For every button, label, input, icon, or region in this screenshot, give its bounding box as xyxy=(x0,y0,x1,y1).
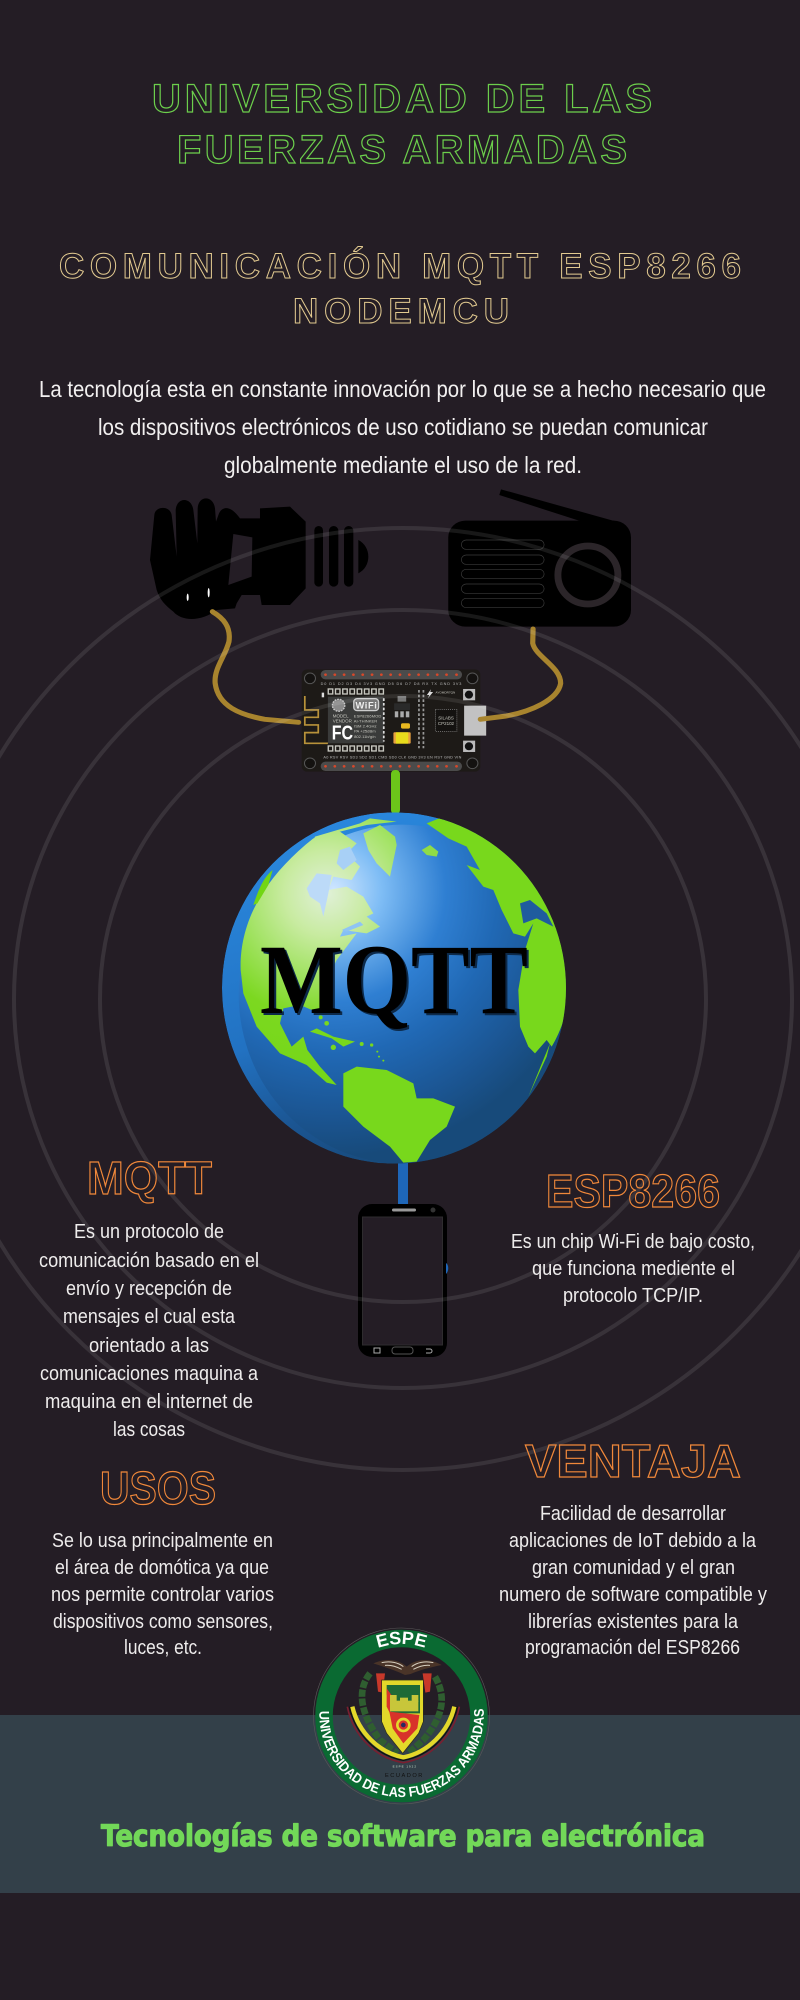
microcontroller board: NodeMCU ESP8266: 802.11b/g/n xyxy=(354,734,376,739)
microcontroller board: NodeMCU ESP8266: MODEL xyxy=(333,713,349,718)
intro paragraph: los dispositivos electrónicos de uso cotidiano se puedan comunicar xyxy=(98,414,708,440)
text: USOS description xyxy=(51,1529,274,1659)
text: ESP8266 description xyxy=(511,1230,755,1307)
text: USOS description: Se lo usa principalmente en xyxy=(52,1529,273,1552)
text: MQTT description: mensajes el cual esta xyxy=(63,1305,236,1328)
microcontroller board: NodeMCU ESP8266: AYOMDR7QN xyxy=(435,690,455,694)
text: MQTT description: Es un protocolo de xyxy=(74,1220,224,1243)
title xyxy=(152,77,652,172)
cable: radio to board xyxy=(480,629,561,719)
connector: globe to phone xyxy=(398,1160,408,1205)
university logo xyxy=(313,1628,490,1804)
microcontroller board: NodeMCU ESP8266: WiFi xyxy=(355,700,377,710)
microcontroller board: NodeMCU ESP8266: ESP8266MOD xyxy=(354,713,381,718)
text: MQTT description: orientado a las xyxy=(89,1334,209,1357)
microcontroller board: NodeMCU ESP8266: D0 D1 D2 D3 D4 3V3 GND D5 D6 D7 D8 RX TX GND 3V3 xyxy=(321,682,461,686)
title: FUERZAS ARMADAS xyxy=(177,128,627,172)
text: USOS description: nos permite controlar varios xyxy=(51,1583,274,1606)
text: MQTT description xyxy=(39,1220,259,1441)
university logo: ESPE xyxy=(376,1632,428,1648)
university logo: UNIVERSIDAD DE LAS FUERZAS ARMADAS xyxy=(319,1709,484,1798)
text: VENTAJA description: numero de software compatible y xyxy=(499,1583,768,1606)
text: MQTT description: envío y recepción de xyxy=(66,1277,232,1300)
intro paragraph xyxy=(39,376,766,478)
microcontroller board: NodeMCU ESP8266: AI-THINKER xyxy=(354,718,377,723)
text: VENTAJA description: Facilidad de desarrollar xyxy=(540,1502,726,1525)
subtitle xyxy=(59,246,741,331)
heading: MQTT: MQTT xyxy=(87,1152,212,1204)
icon: light bulb xyxy=(150,498,368,619)
text: VENTAJA description xyxy=(499,1502,768,1659)
heading: USOS: USOS xyxy=(100,1462,216,1514)
crest xyxy=(347,1660,459,1779)
microcontroller board: NodeMCU ESP8266: A0 RSV RSV SD3 SD2 SD1 CMD SD0 CLK GND 3V3 EN RST GND VIN xyxy=(323,756,462,760)
crest: ECUADOR xyxy=(385,1773,422,1779)
text: VENTAJA description: librerías existentes para la xyxy=(528,1610,739,1633)
panel: MQTT xyxy=(39,1152,259,1441)
microcontroller board: NodeMCU ESP8266: FC xyxy=(332,723,353,744)
text: VENTAJA description: aplicaciones de IoT debido a la xyxy=(509,1529,757,1552)
text: ESP8266 description: protocolo TCP/IP. xyxy=(563,1284,703,1307)
microcontroller board: NodeMCU ESP8266 xyxy=(302,669,486,772)
panel: USOS xyxy=(51,1462,274,1659)
phone xyxy=(358,1204,448,1357)
text: MQTT description: las cosas xyxy=(113,1418,185,1441)
subtitle: NODEMCU xyxy=(293,292,509,331)
text: MQTT description: comunicaciones maquina a xyxy=(40,1362,259,1385)
crest: ESPE 1922 xyxy=(393,1764,416,1768)
text: USOS description: dispositivos como sensores, xyxy=(53,1610,273,1633)
microcontroller board: NodeMCU ESP8266: PA +25dBm xyxy=(354,729,376,734)
microcontroller board: NodeMCU ESP8266: VENDOR xyxy=(333,718,352,723)
microcontroller board: NodeMCU ESP8266: SILABS xyxy=(438,715,454,720)
cable: bulb to board xyxy=(212,612,299,722)
heading: VENTAJA: VENTAJA xyxy=(525,1435,741,1487)
subtitle: COMUNICACIÓN MQTT ESP8266 xyxy=(59,246,741,286)
text: ESP8266 description: Es un chip Wi-Fi de bajo costo, xyxy=(511,1230,755,1253)
globe label: MQTT: MQTT xyxy=(262,926,530,1037)
intro paragraph: globalmente mediante el uso de la red. xyxy=(224,452,582,478)
text: VENTAJA description: gran comunidad y el gran xyxy=(532,1556,735,1579)
panel: VENTAJA xyxy=(499,1435,768,1659)
text: ESP8266 description: que funciona mediente el xyxy=(532,1257,735,1280)
footer title: Tecnologías de software para electrónica xyxy=(101,1819,705,1853)
bottom band xyxy=(0,1715,800,1893)
microcontroller board: NodeMCU ESP8266: ISM 2.4GHz xyxy=(354,724,377,729)
connector: board to globe xyxy=(391,770,400,814)
title: UNIVERSIDAD DE LAS xyxy=(152,77,652,121)
panel: ESP8266 xyxy=(511,1165,755,1307)
text: USOS description: luces, etc. xyxy=(124,1636,202,1659)
heading: ESP8266: ESP8266 xyxy=(546,1165,720,1217)
text: MQTT description: comunicación basado en el xyxy=(39,1249,259,1272)
text: MQTT description: maquina en el internet de xyxy=(45,1390,253,1413)
microcontroller board: NodeMCU ESP8266: CP2102 xyxy=(438,721,455,726)
globe xyxy=(222,812,570,1164)
icon: radio xyxy=(448,489,631,627)
globe label: MQTT: MQTT xyxy=(260,924,528,1035)
concentric signal rings xyxy=(0,528,800,1470)
usb connector xyxy=(464,706,486,736)
text: USOS description: el área de domótica ya que xyxy=(55,1556,269,1579)
text: VENTAJA description: programación del ESP8266 xyxy=(525,1636,740,1659)
